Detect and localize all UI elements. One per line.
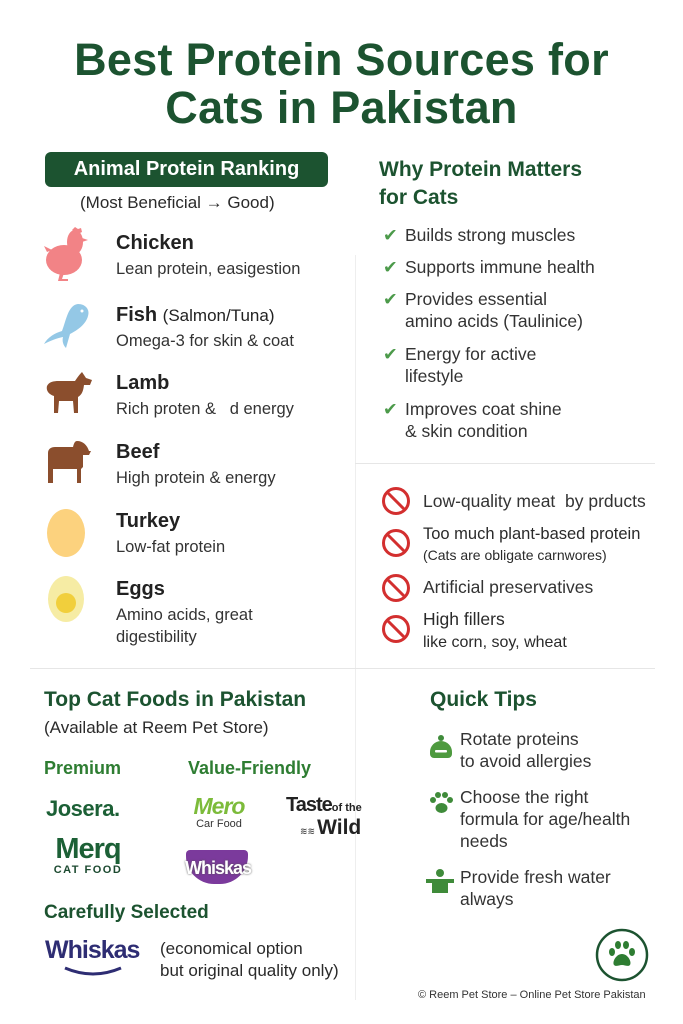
avoid item: fillers [382, 609, 567, 651]
tip: water: always [460, 889, 514, 909]
item: eggs: Amino acids, great [116, 606, 253, 624]
checklist: Builds strong muscles [405, 225, 575, 245]
tip: rotate: to avoid allergies [460, 751, 591, 771]
avoid item: plant protein: (Cats are obligate carnwores) [423, 547, 607, 563]
panel: why protein matters [379, 158, 595, 441]
checklist: ✔ [383, 225, 398, 245]
checklist: ✔ [383, 344, 398, 364]
logo: whiskas blue: Whiskas [45, 936, 139, 964]
checklist: Energy for active [405, 344, 536, 364]
tip: rotate [430, 729, 591, 771]
tip: water [426, 867, 611, 909]
tip: formula: Choose the right [460, 787, 588, 807]
item: turkey: Low-fat protein [116, 538, 225, 556]
label: carefully selected: Carefully Selected [44, 902, 209, 923]
checklist [383, 225, 595, 441]
logo: whiskas purple: Whiskas [185, 858, 251, 878]
checklist: & skin condition [405, 421, 528, 441]
logo: mero: Car Food [196, 818, 242, 830]
item: lamb: Lamb [116, 372, 169, 394]
logo: mero: Mero [194, 793, 244, 819]
avoid item: preservatives [382, 574, 593, 602]
item: beef [48, 441, 276, 487]
tip: formula: needs [460, 831, 508, 851]
heading pill: Animal Protein Ranking [74, 158, 299, 180]
heading: Why Protein Matters [379, 158, 582, 181]
avoid item: fillers: like corn, soy, wheat [423, 634, 567, 651]
item: beef: Beef [116, 441, 159, 463]
label: premium: Premium [44, 758, 121, 778]
logo: taste of the wild [286, 794, 362, 839]
note: but original quality only) [160, 961, 339, 980]
heading pill [45, 152, 328, 187]
logo: josera: Josera. [46, 796, 120, 821]
tip: formula: formula for age/health [460, 809, 630, 829]
logo: taste of the wild: ≋≋Wild [300, 816, 361, 839]
tip: water: Provide fresh water [460, 867, 611, 887]
icon: paw badge [596, 928, 648, 982]
title: Cats in Pakistan [165, 82, 518, 133]
subtitle: (Most Beneficial → Good) [80, 193, 275, 212]
item: fish: Omega-3 for skin & coat [116, 332, 294, 350]
divider lines [355, 255, 356, 1000]
subheading: (Available at Reem Pet Store) [44, 718, 269, 737]
tip: rotate: Rotate proteins [460, 729, 579, 749]
title: Best Protein Sources for [74, 34, 609, 85]
avoid item: byproducts [382, 487, 646, 515]
checklist: Improves coat shine [405, 399, 562, 419]
item: chicken [44, 227, 300, 281]
heading: Top Cat Foods in Pakistan [44, 688, 306, 711]
checklist: Supports immune health [405, 257, 595, 277]
item: fish [44, 304, 294, 350]
checklist: ✔ [383, 257, 398, 277]
item: chicken: Lean protein, easigestion [116, 260, 300, 278]
avoid item: plant protein [382, 525, 640, 563]
item: eggs: Eggs [116, 578, 165, 600]
panel: quick tips [426, 688, 630, 909]
item: turkey [47, 509, 225, 557]
heading: Quick Tips [430, 688, 537, 711]
tip: formula [430, 787, 630, 851]
item: fish: Fish (Salmon/Tuna) [116, 304, 274, 326]
avoid item: byproducts: Low-quality meat by prducts [423, 491, 646, 511]
checklist: ✔ [383, 289, 398, 309]
panel: top cat foods [44, 688, 362, 980]
title [74, 34, 609, 133]
logo: taste of the wild: Tasteof the [286, 794, 362, 816]
checklist: lifestyle [405, 366, 463, 386]
checklist: ✔ [383, 399, 398, 419]
avoid item: plant protein: Too much plant-based protein [423, 525, 640, 543]
note: (economical option [160, 939, 303, 958]
note [160, 939, 339, 980]
logo: merq: CAT FOOD [54, 864, 122, 876]
item: eggs [48, 576, 253, 646]
logo: mero [194, 793, 245, 830]
panel: animal protein ranking [44, 152, 328, 646]
item: turkey: Turkey [116, 510, 180, 532]
logo: merq: Merq [55, 833, 121, 865]
item: lamb [46, 372, 294, 418]
item: beef: High protein & energy [116, 469, 276, 487]
item: lamb: Rich proten & d energy [116, 400, 294, 418]
heading: for Cats [379, 186, 458, 209]
item: chicken: Chicken [116, 232, 194, 254]
checklist: amino acids (Taulinice) [405, 311, 583, 331]
avoid item: fillers: High fillers [423, 609, 505, 629]
heading [379, 158, 582, 209]
label: value-friendly: Value-Friendly [188, 758, 311, 778]
avoid item: preservatives: Artificial preservatives [423, 577, 593, 597]
footer: © Reem Pet Store – Online Pet Store Pakistan [418, 989, 646, 1001]
panel: avoid list [382, 487, 646, 651]
checklist: Provides essential [405, 289, 547, 309]
item: eggs: digestibility [116, 628, 197, 646]
logo: whiskas purple [184, 850, 253, 884]
